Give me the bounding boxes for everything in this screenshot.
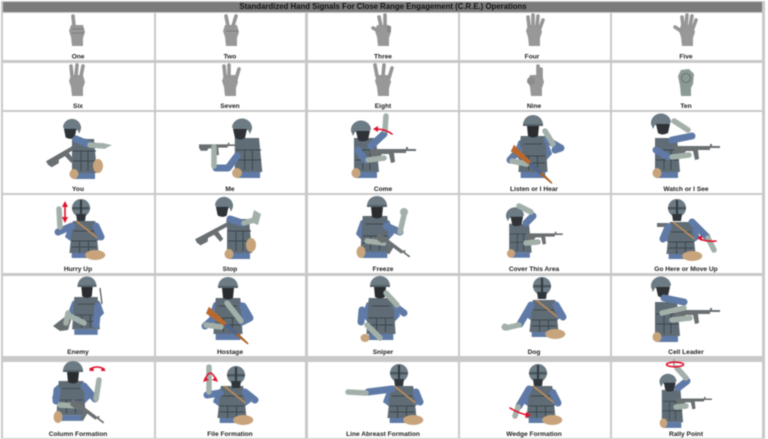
label: Hurry Up xyxy=(64,266,92,273)
panel: Come xyxy=(308,112,458,193)
label: Hostage xyxy=(217,349,243,356)
icon: soldier file formation signal xyxy=(203,366,255,425)
label: Sniper xyxy=(373,349,394,356)
label: Rally Point xyxy=(669,431,704,438)
panel: Freeze xyxy=(308,195,458,273)
panel: You xyxy=(3,112,154,193)
icon: soldier pointing to self xyxy=(199,118,262,178)
panel: Watch or I See xyxy=(612,112,762,193)
label: You xyxy=(72,186,84,193)
label: One xyxy=(72,54,85,60)
panel: Go Here or Move Up xyxy=(612,195,762,273)
panel: Enemy xyxy=(3,276,154,356)
label: Column Formation xyxy=(49,431,107,438)
panel: Hurry Up xyxy=(3,195,154,273)
icon: soldier cell leader signal xyxy=(651,276,720,342)
icon: soldier rally point signal xyxy=(659,359,712,428)
label: Dog xyxy=(528,349,540,356)
panel: Three xyxy=(308,13,458,60)
icon: hand two xyxy=(223,16,239,46)
panel: Eight xyxy=(308,63,458,110)
icon: soldier come signal xyxy=(351,116,416,178)
icon: soldier freeze signal xyxy=(356,196,411,266)
icon: hand nine xyxy=(527,66,544,96)
icon: hand ten xyxy=(678,69,694,96)
header bar: Standardized Hand Signals For Close Range Engagement (C.R.E.) Operations xyxy=(239,2,527,11)
panel: Four xyxy=(460,13,610,60)
label: Enemy xyxy=(67,349,89,356)
icon: soldier dog signal xyxy=(502,277,565,339)
panel: Five xyxy=(612,13,762,60)
icon: soldier hostage signal xyxy=(204,277,250,347)
panel: Seven xyxy=(156,63,305,110)
panel: Wedge Formation xyxy=(460,362,610,438)
label: Stop xyxy=(223,266,237,273)
label: Listen or I Hear xyxy=(510,186,558,193)
panel: Column Formation xyxy=(3,361,154,438)
label: Line Abreast Formation xyxy=(346,431,420,438)
label: Go Here or Move Up xyxy=(654,266,718,273)
label: Cell Leader xyxy=(668,349,704,356)
panel: Six xyxy=(3,63,154,110)
label: Six xyxy=(73,103,83,110)
icon: soldier sniper signal xyxy=(360,276,404,342)
panel: Ten xyxy=(612,63,762,110)
icon: hand one xyxy=(69,16,85,46)
label: Cover This Area xyxy=(509,266,559,273)
icon: hand eight xyxy=(375,65,392,96)
label: Nine xyxy=(527,103,541,110)
label: Ten xyxy=(680,103,692,110)
label: Come xyxy=(374,186,392,193)
panel: Two xyxy=(156,13,305,60)
label: Two xyxy=(224,54,236,60)
panel: Me xyxy=(156,112,305,193)
panel: Nine xyxy=(460,63,610,110)
header bar xyxy=(3,2,762,12)
icon: soldier watch signal xyxy=(651,113,720,178)
panel: Sniper xyxy=(308,276,458,356)
label: Watch or I See xyxy=(663,186,709,193)
icon: soldier enemy signal xyxy=(53,276,104,335)
icon: soldier listen signal xyxy=(509,115,561,186)
label: Seven xyxy=(220,103,240,110)
label: File Formation xyxy=(207,431,253,438)
panel: Cell Leader xyxy=(612,276,762,356)
icon: soldier hurry up signal xyxy=(58,199,105,260)
icon: soldier go here signal xyxy=(657,199,716,261)
panel: File Formation xyxy=(156,362,305,438)
panel: Line Abreast Formation xyxy=(308,362,458,438)
icon: hand four xyxy=(526,15,543,46)
icon: hand six xyxy=(69,65,85,96)
panel: Cover This Area xyxy=(460,195,610,273)
icon: soldier column formation signal xyxy=(52,361,106,432)
icon: soldier cover area signal xyxy=(506,206,563,258)
icon: soldier stop signal xyxy=(194,197,261,259)
label: Freeze xyxy=(373,266,394,273)
icon: hand seven xyxy=(222,65,239,96)
label: Eight xyxy=(375,103,392,110)
panel: Stop xyxy=(156,195,305,273)
panel: One xyxy=(3,13,154,60)
label: Five xyxy=(679,54,693,60)
icon: soldier wedge formation signal xyxy=(510,364,562,425)
label: Four xyxy=(525,54,540,60)
label: Three xyxy=(374,54,392,60)
icon: hand five xyxy=(675,15,696,46)
panel: Rally Point xyxy=(612,359,762,438)
panel: Dog xyxy=(460,276,610,356)
icon: soldier line abreast signal xyxy=(348,364,423,425)
icon: soldier pointing xyxy=(45,119,112,179)
panel: Listen or I Hear xyxy=(460,112,610,193)
label: Me xyxy=(225,186,235,193)
icon: hand three xyxy=(373,15,391,46)
label: Wedge Formation xyxy=(506,431,562,438)
panel: Hostage xyxy=(156,276,305,356)
